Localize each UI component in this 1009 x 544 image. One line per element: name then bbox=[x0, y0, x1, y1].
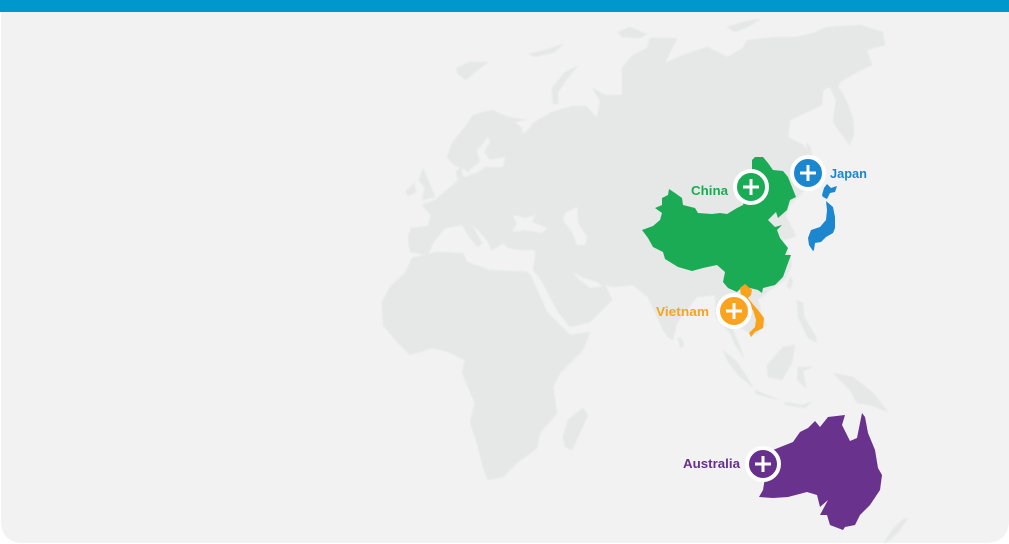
label: Japan: Japan bbox=[830, 166, 867, 181]
marker: China bbox=[735, 171, 767, 203]
sea: Black Sea bbox=[512, 215, 547, 233]
marker: Australia bbox=[747, 448, 779, 480]
landmass: Svalbard bbox=[456, 62, 488, 80]
sea: Caspian Sea bbox=[563, 207, 587, 245]
region: Vietnam bbox=[740, 284, 764, 337]
icon: plus bbox=[726, 303, 742, 319]
world map: grey landmasses bbox=[382, 19, 908, 543]
landmass: Severnaya Zemlya bbox=[618, 27, 647, 38]
landmass: New Zealand bbox=[884, 518, 908, 543]
icon: plus bbox=[755, 456, 771, 472]
marker: Japan bbox=[792, 157, 824, 189]
region: Australia bbox=[759, 413, 882, 530]
marker ring bbox=[792, 157, 824, 189]
marker ring bbox=[747, 448, 779, 480]
region: Japan bbox=[808, 184, 837, 251]
landmass: Ireland bbox=[406, 183, 416, 196]
landmass: Sumatra bbox=[723, 350, 753, 387]
landmass: Novaya Zemlya bbox=[552, 66, 578, 104]
sea: Baltic Sea bbox=[465, 137, 505, 176]
landmass: Borneo bbox=[767, 345, 795, 380]
sea: Persian Gulf bbox=[572, 272, 602, 288]
label: Vietnam: Vietnam bbox=[656, 304, 709, 319]
landmass: Philippines bbox=[797, 300, 817, 343]
marker ring bbox=[718, 295, 750, 327]
landmass: Sakhalin bbox=[806, 143, 813, 160]
landmass: Taiwan bbox=[787, 276, 793, 290]
landmass: Lesser Sunda Islands bbox=[784, 401, 812, 408]
icon: plus bbox=[800, 165, 816, 181]
marker ring bbox=[735, 171, 767, 203]
landmass: Africa bbox=[382, 252, 590, 480]
landmass: New Siberian Islands bbox=[727, 19, 760, 32]
landmass: Great Britain bbox=[419, 168, 435, 200]
icon: plus bbox=[743, 179, 759, 195]
label: Australia: Australia bbox=[683, 456, 741, 471]
landmass: Sri Lanka bbox=[678, 337, 684, 348]
landmass: Madagascar bbox=[563, 408, 588, 450]
landmass: Java bbox=[755, 390, 780, 400]
landmass: Eurasia bbox=[408, 25, 885, 358]
landmass: Franz Josef Land bbox=[529, 44, 563, 57]
region: China bbox=[642, 157, 796, 293]
inland seas bbox=[465, 120, 602, 288]
top bar bbox=[0, 0, 1009, 12]
landmass: New Guinea bbox=[833, 373, 888, 412]
marker: Vietnam bbox=[718, 295, 750, 327]
sea: White Sea bbox=[515, 120, 532, 134]
landmass: Sulawesi bbox=[797, 367, 813, 388]
label: China: China bbox=[691, 183, 729, 198]
